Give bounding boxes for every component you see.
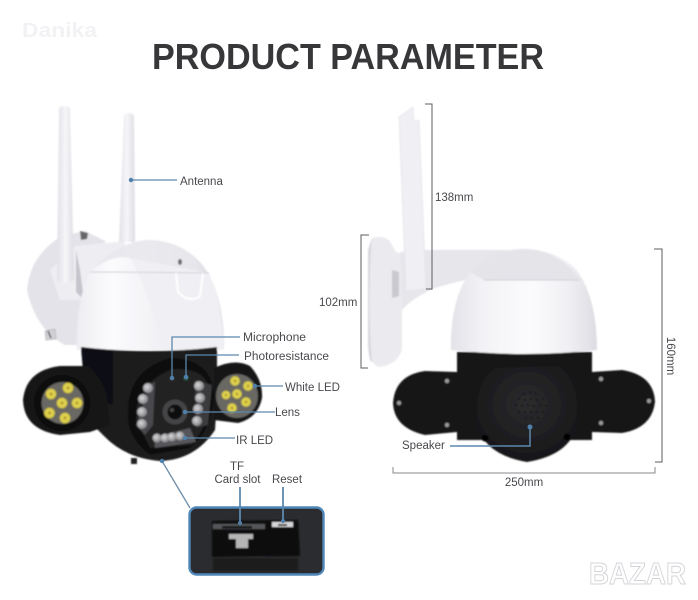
callout labels: Microphone [243, 332, 306, 344]
left LED lamp [23, 366, 110, 435]
dimension labels: 250mm [505, 477, 543, 489]
antenna [399, 107, 426, 291]
callout labels: Antenna [180, 176, 223, 188]
TF card inset [190, 508, 324, 574]
black body [457, 352, 592, 440]
title: PRODUCT PARAMETER [152, 36, 544, 77]
callout labels: Lens [275, 407, 300, 419]
callout labels: Reset [272, 474, 303, 486]
dimension brackets [361, 104, 662, 473]
IR LEDs [136, 380, 212, 448]
dimension labels: 138mm [435, 192, 473, 204]
camera rear view [368, 107, 655, 462]
right lamp back [592, 370, 655, 433]
speaker grille [515, 391, 547, 419]
callout labels: TF [230, 461, 244, 473]
card slot opening [212, 520, 300, 571]
antenna left [57, 106, 74, 283]
wall mount [27, 231, 125, 345]
dimension labels [319, 192, 676, 489]
right LED lamp [214, 362, 262, 423]
rear dome [451, 249, 597, 354]
left lamp back [393, 371, 457, 435]
microphone and sensor holes [170, 376, 188, 382]
callout labels: Photoresistance [244, 351, 329, 363]
black body [81, 347, 217, 464]
callout labels [180, 176, 445, 486]
lens [162, 400, 188, 424]
antenna right [119, 113, 135, 242]
dimension labels: 160mm [664, 337, 676, 375]
dimension labels: 102mm [319, 297, 357, 309]
callout labels: Card slot [214, 474, 261, 486]
camera front view [23, 106, 262, 464]
leader lines [131, 180, 530, 524]
leader dots [129, 178, 533, 525]
callout labels: Speaker [402, 440, 445, 452]
dome [77, 240, 224, 350]
rear ball [476, 366, 577, 462]
callout labels: IR LED [236, 435, 273, 447]
watermark: Bazar: BAZAR [589, 556, 686, 591]
watermark: Danika: Danika [22, 20, 98, 42]
wall plate [368, 237, 402, 367]
callout labels: White LED [285, 382, 340, 394]
mount arm [400, 250, 530, 310]
